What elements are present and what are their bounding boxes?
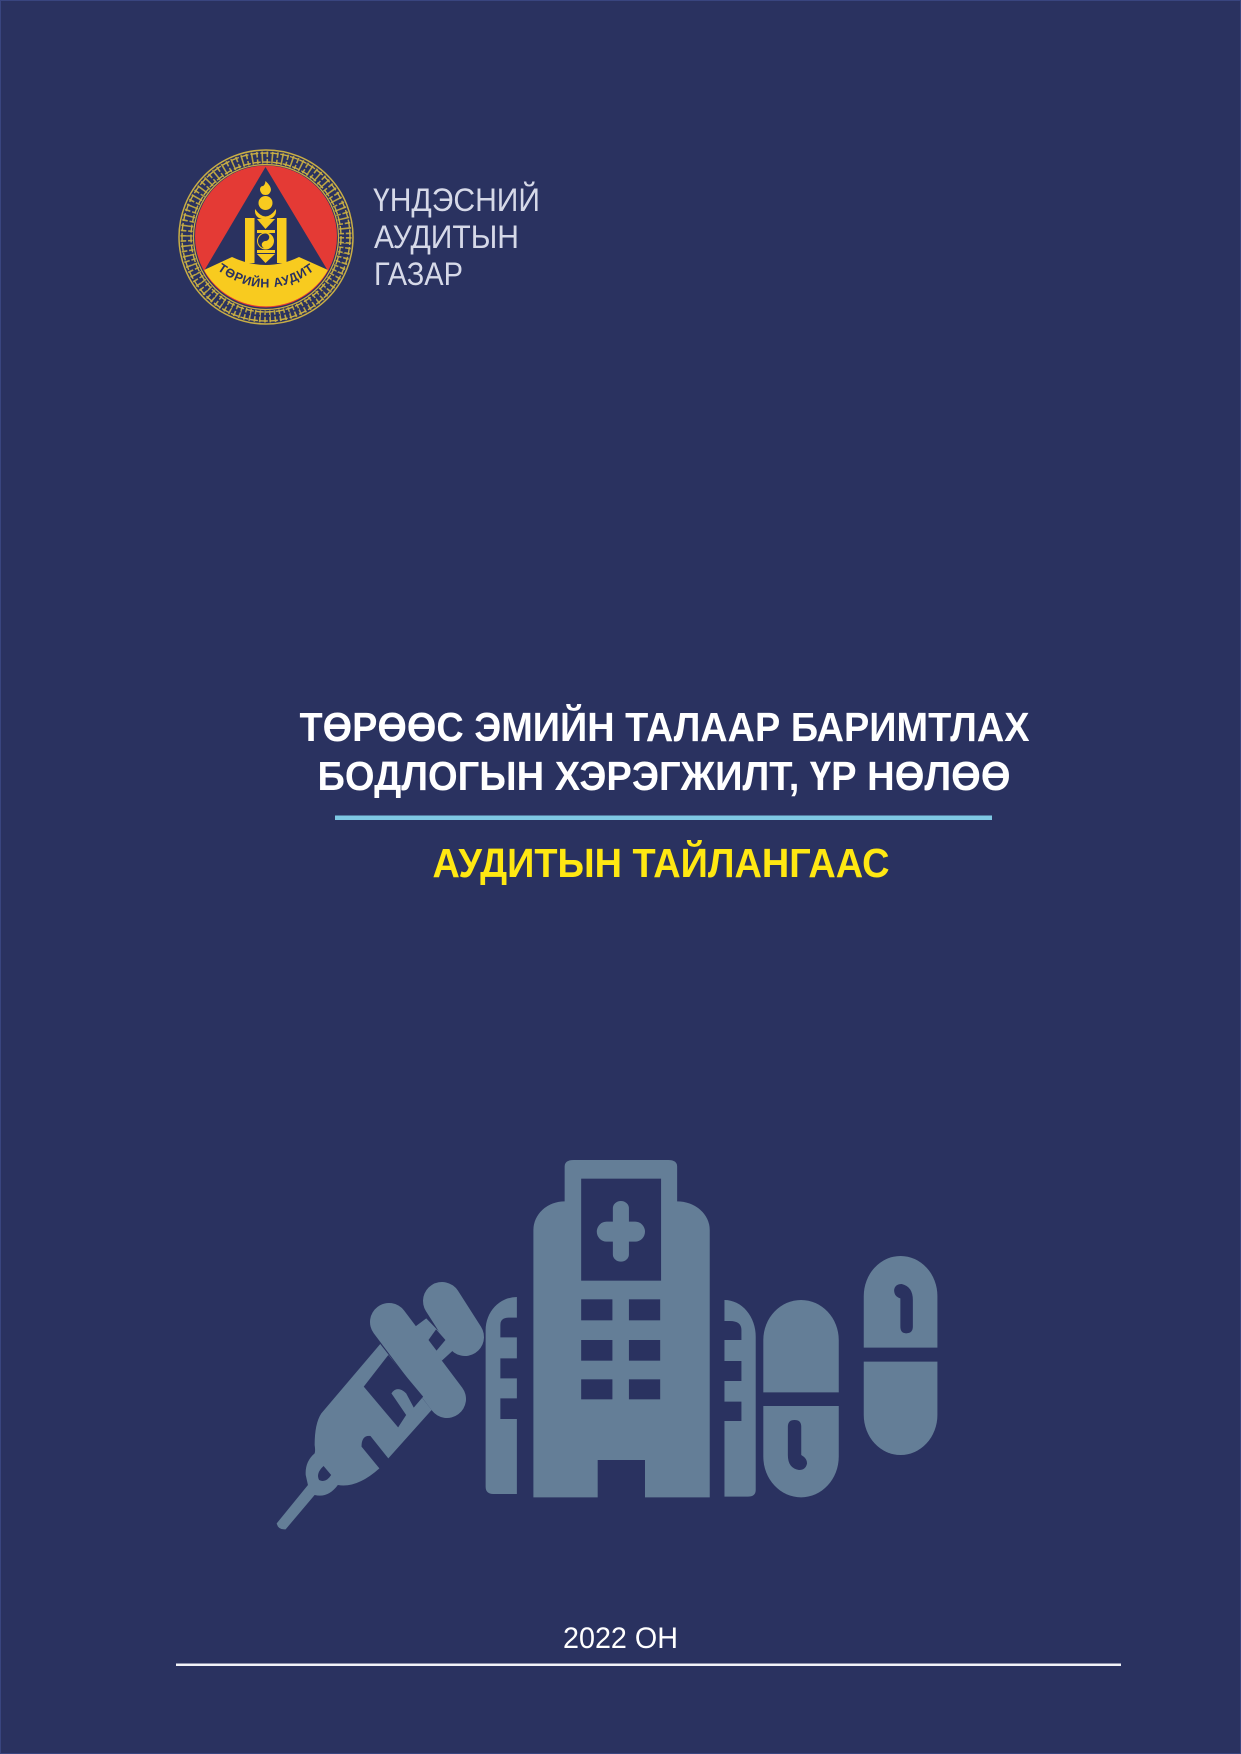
hospital cross — [597, 1201, 645, 1262]
subtitle: АУДИТЫН ТАЙЛАНГААС — [432, 840, 890, 886]
syringe body — [277, 1318, 455, 1529]
logo: state audit emblem — [178, 149, 354, 325]
organisation name — [373, 182, 540, 292]
name line 2: АУДИТЫН — [374, 219, 519, 255]
icon: hospital — [486, 1160, 756, 1497]
name line 3: ГАЗАР — [374, 256, 463, 292]
title line 1: ТӨРӨӨС ЭМИЙН ТАЛААР БАРИМТЛАХ — [300, 704, 1030, 750]
right pill top half — [864, 1256, 937, 1348]
icon: left pill — [763, 1300, 839, 1497]
syringe finger flange — [389, 1322, 447, 1399]
left pill top half — [763, 1300, 839, 1392]
year: 2022 ОН — [563, 1622, 678, 1655]
left pill bottom half — [763, 1406, 839, 1497]
hospital main building — [533, 1160, 710, 1497]
emblem meander ring — [179, 150, 353, 324]
syringe plunger cap — [442, 1301, 465, 1337]
emblem blue triangle — [204, 167, 328, 271]
emblem red disc — [195, 166, 337, 308]
emblem banner text curve — [216, 269, 316, 288]
icon: syringe — [277, 1301, 465, 1529]
emblem yellow banner — [204, 257, 328, 306]
emblem soyombo symbol — [245, 181, 286, 263]
hospital windows — [581, 1299, 660, 1399]
title divider — [335, 816, 992, 820]
name line 1: ҮНДЭСНИЙ — [373, 182, 540, 218]
emblem banner text: ТӨРИЙН АУДИТ — [220, 262, 312, 288]
left pill highlight — [788, 1420, 807, 1470]
title — [300, 704, 1030, 799]
right pill highlight — [894, 1284, 913, 1333]
hospital sign panel — [581, 1179, 661, 1281]
footer rule — [176, 1664, 1121, 1666]
illustration: syringe, hospital and pills — [277, 1160, 937, 1529]
icon: right pill — [864, 1256, 937, 1455]
hospital right wing — [724, 1300, 756, 1497]
title line 2: БОДЛОГЫН ХЭРЭГЖИЛТ, ҮР НӨЛӨӨ — [318, 753, 1010, 799]
hospital left wing — [486, 1297, 517, 1494]
right pill bottom half — [864, 1362, 937, 1455]
